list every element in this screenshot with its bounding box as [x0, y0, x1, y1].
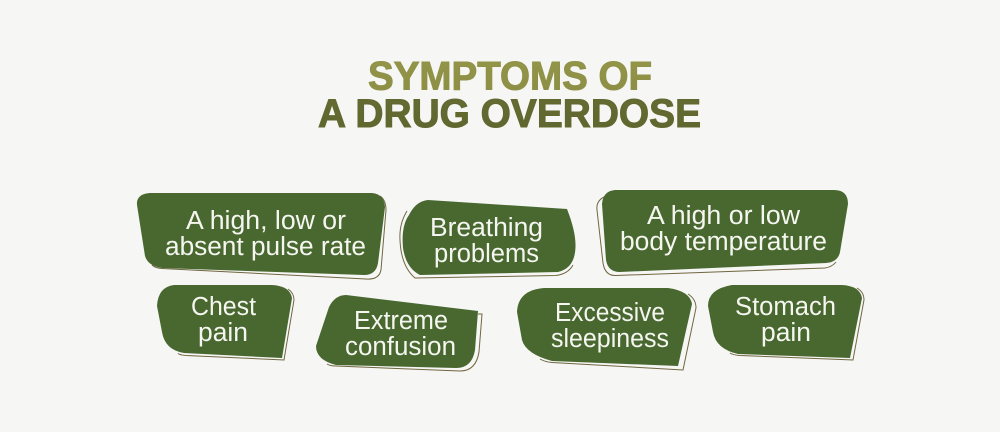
- card: chest pain: Chest: [191, 293, 256, 321]
- card: chest pain: pain: [198, 319, 248, 347]
- card: pulse rate: A high, low or: [186, 207, 347, 235]
- card: breathing problems: Breathing: [430, 214, 543, 242]
- card: extreme confusion: confusion: [345, 333, 456, 361]
- card: excessive sleepiness: [517, 288, 696, 370]
- card: extreme confusion: [316, 295, 482, 371]
- card: stomach pain: pain: [761, 319, 811, 347]
- card: stomach pain: Stomach: [735, 293, 836, 321]
- title line 1: SYMPTOMS OF: [368, 54, 652, 98]
- card: breathing problems: problems: [434, 240, 539, 268]
- card: excessive sleepiness: sleepiness: [551, 325, 669, 353]
- card: pulse rate: [137, 193, 386, 279]
- card: body temperature: body temperature: [620, 228, 827, 256]
- card: body temperature: A high or low: [647, 202, 801, 230]
- card: body temperature: [597, 190, 848, 276]
- card: breathing problems: [400, 200, 576, 278]
- title line 2: A DRUG OVERDOSE: [318, 92, 701, 136]
- card: excessive sleepiness: Excessive: [555, 299, 665, 327]
- card: extreme confusion: Extreme: [354, 307, 448, 335]
- title: [318, 54, 701, 136]
- card: stomach pain: [708, 285, 864, 360]
- card: chest pain: [157, 285, 294, 360]
- card: pulse rate: absent pulse rate: [165, 233, 366, 261]
